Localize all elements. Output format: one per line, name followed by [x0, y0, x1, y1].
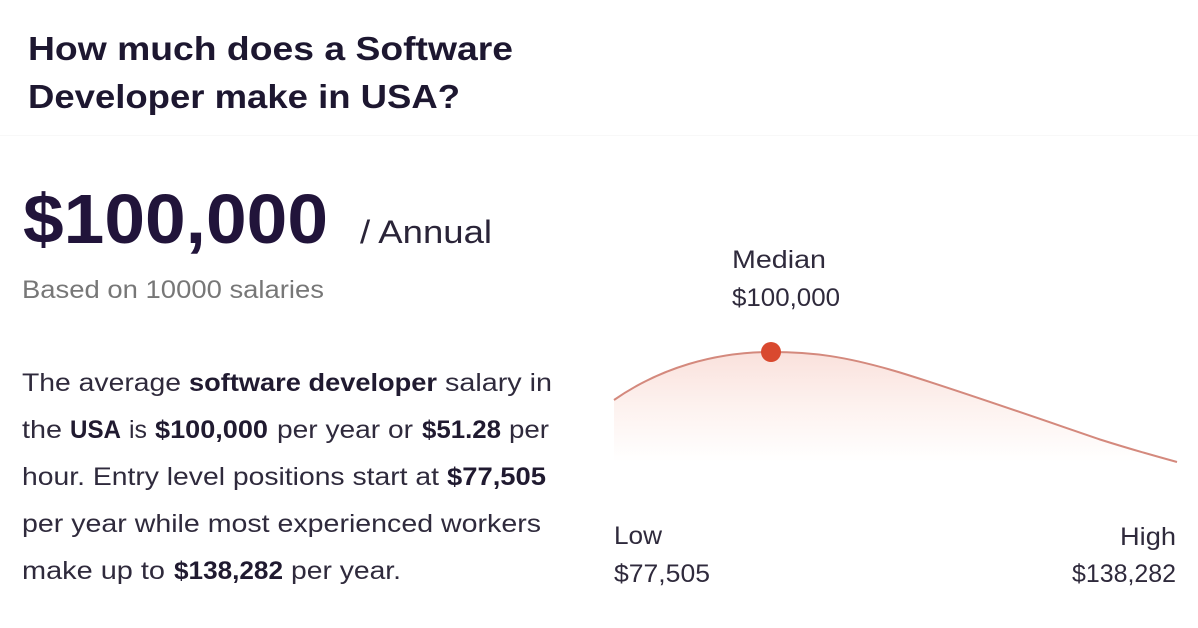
- description paragraph: The average: [22, 369, 181, 397]
- description paragraph: $77,505: [447, 463, 546, 491]
- description paragraph: make up to: [22, 557, 165, 585]
- median marker: [761, 342, 781, 362]
- curve line: [614, 352, 1177, 462]
- description paragraph: $138,282: [174, 557, 283, 585]
- high label: [1072, 523, 1176, 588]
- median label: [732, 246, 840, 312]
- annual salary figure: $100,000: [23, 180, 328, 258]
- title: [28, 30, 513, 115]
- description paragraph: software developer: [189, 369, 437, 397]
- description paragraph: per: [509, 416, 549, 444]
- description paragraph: $51.28: [422, 416, 501, 444]
- description paragraph: the: [22, 416, 62, 444]
- salary count note: Based on 10000 salaries: [22, 276, 324, 304]
- median label: Median: [732, 246, 826, 274]
- description paragraph: [22, 369, 552, 585]
- title: Developer make in USA?: [28, 78, 460, 115]
- description paragraph: salary in: [445, 369, 552, 397]
- description paragraph: per year.: [291, 557, 401, 585]
- high label: High: [1120, 523, 1176, 551]
- title: How much does a Software: [28, 30, 513, 67]
- curve area fill: [614, 352, 1177, 470]
- high label: $138,282: [1072, 560, 1176, 588]
- description paragraph: USA: [70, 416, 121, 444]
- median label: $100,000: [732, 284, 840, 312]
- low label: [614, 522, 710, 588]
- description paragraph: per year or: [277, 416, 413, 444]
- description paragraph: $100,000: [155, 416, 268, 444]
- salary distribution chart: [614, 342, 1177, 470]
- low label: Low: [614, 522, 663, 550]
- low label: $77,505: [614, 560, 710, 588]
- annual label: / Annual: [360, 214, 492, 250]
- description paragraph: hour. Entry level positions start at: [22, 463, 439, 491]
- description paragraph: is: [129, 416, 147, 444]
- description paragraph: per year while most experienced workers: [22, 510, 541, 538]
